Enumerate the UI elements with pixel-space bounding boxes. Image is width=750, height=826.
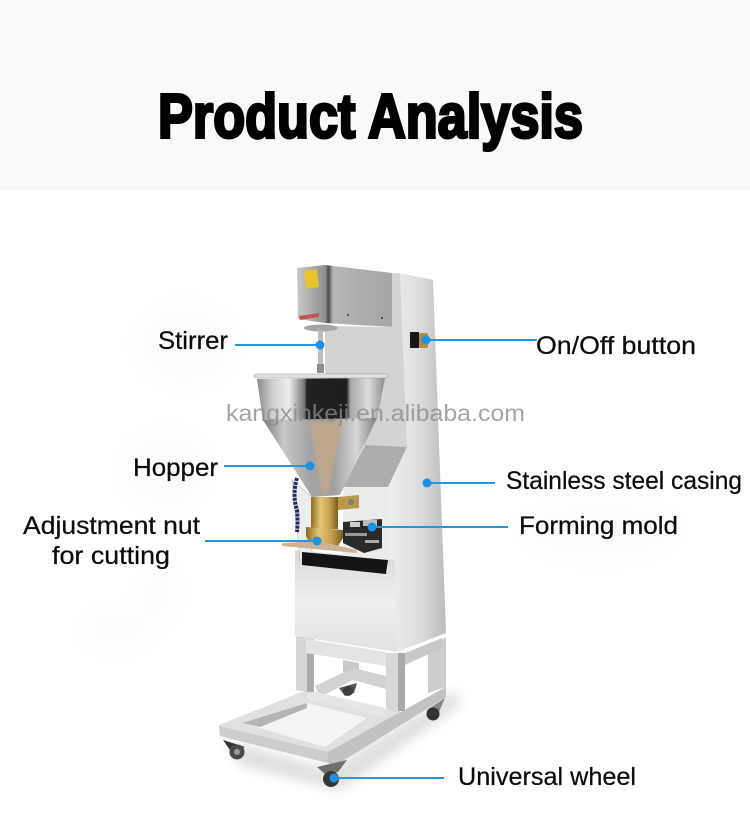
floor shadow <box>226 690 460 790</box>
callout: universal wheel <box>330 763 636 791</box>
faint label backdrop blobs <box>77 303 680 650</box>
legs and rails <box>296 636 446 713</box>
callout: adjustment nut for cutting: Adjustment nut <box>23 512 200 540</box>
blue coolant hose <box>294 478 298 532</box>
callout: adjustment nut for cutting <box>23 512 322 570</box>
stirrer shaft <box>304 324 338 373</box>
wheels <box>223 698 445 787</box>
callout: stirrer: Stirrer <box>158 327 228 355</box>
middle cabinet panel <box>343 487 388 572</box>
machine illustration <box>219 265 460 790</box>
callout: stainless steel casing: Stainless steel casing <box>506 467 742 495</box>
callout: forming mold: Forming mold <box>519 512 678 540</box>
callout: forming mold <box>368 512 678 540</box>
motor head <box>297 265 392 327</box>
callout: on/off button: On/Off button <box>536 332 696 360</box>
hopper <box>254 374 388 497</box>
forming mold <box>343 519 382 553</box>
cutting plate <box>282 541 357 553</box>
rear leg and wheel <box>315 660 386 697</box>
title: Product Analysis <box>158 82 583 152</box>
black slot <box>302 552 388 574</box>
recessed shadow wedge <box>343 445 407 487</box>
callout: on/off button <box>422 332 696 360</box>
warning label <box>304 269 319 289</box>
watermark: kangxinkeji.en.alibaba.com <box>226 400 525 426</box>
on/off button <box>410 332 428 348</box>
callout: adjustment nut for cutting: for cutting <box>52 542 170 570</box>
top banner background <box>0 0 750 191</box>
callout: hopper <box>133 454 314 482</box>
lower cabinet front panel <box>295 550 397 652</box>
base frame <box>219 687 446 767</box>
callout: universal wheel: Universal wheel <box>458 763 636 791</box>
callout: stirrer <box>158 327 324 355</box>
tower side casing <box>388 273 446 652</box>
brass neck and clamp <box>306 495 359 546</box>
upper rear panel <box>325 273 407 447</box>
callout: hopper: Hopper <box>133 454 218 482</box>
